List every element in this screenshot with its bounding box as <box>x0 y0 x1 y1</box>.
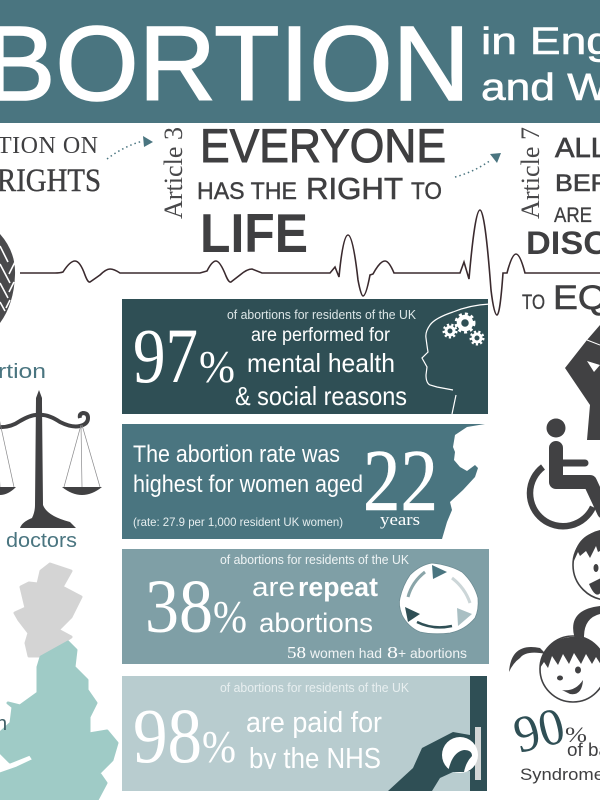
subtitle line one: in Eng <box>481 21 600 63</box>
by the NHS: by the NHS <box>249 743 381 775</box>
subtitle line two: and W <box>481 67 600 109</box>
icon: boy face <box>573 530 600 600</box>
map: england and wales <box>0 642 117 800</box>
line: social reasons: & social reasons <box>235 381 407 411</box>
heading: convention on human rights: TION ON <box>0 133 98 159</box>
big 22: 22 <box>363 433 438 530</box>
caption: of abortions for residents of the UK <box>227 308 417 322</box>
map: scotland <box>15 564 81 656</box>
icon: scales of justice <box>0 390 102 528</box>
line one: The abortion rate was <box>133 441 340 468</box>
life: LIFE <box>200 202 308 264</box>
icon: repeat cycle <box>399 563 478 634</box>
to: TO <box>522 291 545 314</box>
icon: raised fist <box>565 325 600 440</box>
article 7 label: Article 7 <box>516 127 545 219</box>
note number: 58 <box>287 643 306 662</box>
has the: HAS THE <box>197 178 297 205</box>
are: ARE <box>554 204 592 227</box>
rate note: (rate: 27.9 per 1,000 resident UK women) <box>133 515 343 529</box>
big 38: 38 <box>145 565 213 649</box>
panel: 97% mental health <box>122 299 490 414</box>
arrow: to article 7 <box>455 153 501 177</box>
panel: highest rate age 22 <box>122 424 485 539</box>
icon: hand inserting coin <box>388 676 487 791</box>
panel: 98% paid by NHS <box>122 676 487 791</box>
panel: 38% repeat abortions <box>122 549 489 664</box>
caption: of abortions for residents of the UK <box>220 553 410 567</box>
big 98: 98 <box>133 692 202 779</box>
years: years <box>380 510 420 529</box>
label: doctors: doctors <box>6 530 77 552</box>
article 3 label: Article 3 <box>159 127 188 219</box>
ecg heartbeat line <box>20 210 600 315</box>
icon: head with gears <box>422 304 490 414</box>
line: are performed for: are performed for <box>251 325 391 346</box>
arrow: to article 3 <box>107 136 153 159</box>
icon: girl face <box>509 606 600 702</box>
syndrome: Syndrome <box>520 765 600 784</box>
are: are <box>252 572 295 602</box>
stat: 90% of babies with Down Syndrome: 90 <box>508 697 570 765</box>
percent: % <box>565 722 587 747</box>
article 3 statement: EVERYONE <box>200 119 446 172</box>
percent: % <box>199 342 235 392</box>
stat: 90% of babies with Down Syndrome <box>508 697 600 784</box>
repeat: repeat <box>298 572 378 602</box>
big 97: 97 <box>133 312 198 399</box>
heading line two: RIGHTS <box>0 163 101 199</box>
note text: women had <box>309 645 382 661</box>
are paid for: are paid for <box>246 707 382 739</box>
right: RIGHT <box>306 171 403 206</box>
article 7 statement <box>522 132 600 317</box>
heading: convention on human rights <box>0 133 101 199</box>
percent: % <box>213 591 247 642</box>
abortions: abortions <box>259 608 373 638</box>
note end: + abortions <box>398 645 467 661</box>
article 3 statement <box>197 119 446 264</box>
line: mental health: mental health <box>247 348 395 378</box>
note number two: 8 <box>387 643 398 662</box>
percent: % <box>202 722 236 772</box>
icon: un wreath <box>0 234 15 323</box>
icon: wheelchair <box>530 418 600 526</box>
to: TO <box>411 178 442 205</box>
header banner <box>0 0 600 123</box>
caption: of abortions for residents of the UK <box>220 681 410 695</box>
line two: highest for women aged <box>133 471 363 498</box>
